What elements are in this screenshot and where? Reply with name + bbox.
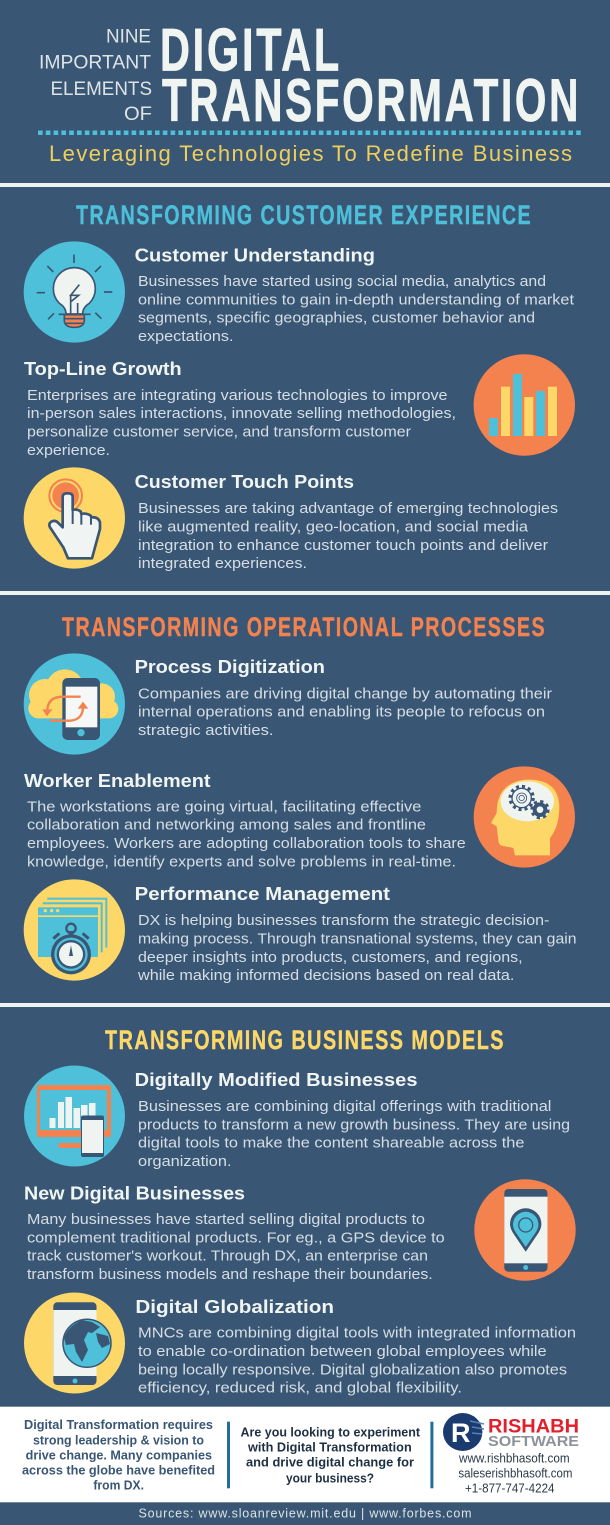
- title kicker: OF: [124, 103, 152, 125]
- contact details: [458, 1451, 572, 1495]
- body text: [137, 913, 577, 984]
- footer panel: [0, 1407, 610, 1502]
- panel: process digitization: [24, 653, 552, 755]
- center call to action: with Digital Transformation: [247, 1441, 412, 1455]
- icon: phone with location pin: [474, 1179, 576, 1281]
- body text: experience.: [27, 443, 110, 459]
- body text: [138, 501, 558, 572]
- center call to action: Are you looking to experiment: [240, 1426, 421, 1440]
- heading: Performance Management: [135, 883, 390, 904]
- contact details: www.rishbhasoft.com: [458, 1451, 570, 1465]
- panel: customer touch points: [24, 467, 558, 572]
- left callout: [22, 1418, 215, 1493]
- icon: light bulb: [24, 241, 125, 343]
- body text: complement traditional products. For eg., a GPS device to: [27, 1230, 445, 1246]
- body text: organization.: [138, 1154, 232, 1170]
- body text: [138, 686, 552, 739]
- body text: [138, 274, 574, 345]
- body text: personalize customer service, and transform customer: [27, 425, 411, 441]
- heading: Customer Understanding: [135, 245, 375, 266]
- center call to action: your business?: [286, 1471, 374, 1485]
- icon: cloud and phone: [24, 653, 125, 755]
- body text: in-person sales interactions, innovate selling methodologies,: [27, 406, 456, 422]
- icon: bar chart: [474, 354, 575, 456]
- icon: phone with globe: [24, 1292, 125, 1394]
- body text: efficiency, reduced risk, and global flexibility.: [138, 1381, 462, 1397]
- heading: New Digital Businesses: [24, 1183, 245, 1204]
- body text: collaboration and networking among sales and frontline: [27, 818, 426, 834]
- body text: Companies are driving digital change by automating their: [138, 686, 552, 702]
- body text: to enable co-ordination between global employees while: [138, 1344, 547, 1360]
- body text: The workstations are going virtual, facilitating effective: [27, 799, 421, 815]
- body text: internal operations and enabling its people to refocus on: [138, 705, 545, 721]
- body text: [27, 799, 466, 870]
- body text: deeper insights into products, customers, and regions,: [138, 950, 523, 966]
- body text: integration to enhance customer touch points and deliver: [138, 538, 548, 554]
- title kicker: IMPORTANT: [39, 51, 151, 73]
- body text: knowledge, identify experts and solve problems in real-time.: [27, 854, 456, 870]
- icon: windows and stopwatch: [24, 879, 125, 981]
- body text: transform business models and reshape their boundaries.: [27, 1267, 433, 1283]
- panel: worker enablement: [24, 766, 575, 870]
- body text: Businesses have started using social media, analytics and: [138, 274, 546, 290]
- title kicker: ELEMENTS: [50, 78, 152, 100]
- main title: DIGITAL: [160, 17, 342, 84]
- heading: Top-Line Growth: [24, 358, 182, 379]
- body text: expectations.: [138, 329, 234, 345]
- icon: pointing hand: [24, 467, 125, 569]
- title kicker: NINE: [106, 26, 151, 48]
- body text: online communities to gain in-depth understanding of market: [138, 292, 574, 308]
- heading: Process Digitization: [135, 656, 325, 677]
- center call to action: and drive digital change for: [246, 1456, 414, 1470]
- icon: monitor and phone: [24, 1066, 125, 1166]
- heading: Digital Globalization: [135, 1296, 334, 1317]
- left callout: drive change. Many companies: [26, 1449, 212, 1463]
- body text: MNCs are combining digital tools with integrated information: [138, 1326, 576, 1342]
- body text: while making informed decisions based on real data.: [137, 968, 514, 984]
- body text: making process. Through transnational systems, they can gain: [138, 932, 577, 948]
- contact details: saleserishbhasoft.com: [458, 1466, 572, 1480]
- left callout: strong leadership & vision to: [33, 1433, 204, 1447]
- panel: digitally modified businesses: [24, 1066, 570, 1170]
- logo: Rishabh Software: [443, 1413, 579, 1451]
- body text: [27, 388, 456, 459]
- body text: integrated experiences.: [138, 556, 307, 572]
- body text: Businesses are taking advantage of emerging technologies: [138, 501, 558, 517]
- title kicker: [39, 26, 152, 125]
- sources line: Sources: www.sloanreview.mit.edu | www.forbes.com: [138, 1507, 472, 1521]
- logo: Rishabh Software: R: [451, 1418, 470, 1448]
- body text: track customer's workout. Through DX, an enterprise can: [27, 1249, 428, 1265]
- body text: [138, 1099, 570, 1170]
- heading: Digitally Modified Businesses: [135, 1069, 418, 1090]
- body text: [138, 1326, 576, 1397]
- body text: [27, 1212, 445, 1283]
- panel: new digital businesses: [24, 1179, 576, 1283]
- panel: customer understanding: [24, 241, 574, 345]
- heading: Customer Touch Points: [135, 471, 354, 492]
- panel: top-line growth: [24, 354, 575, 459]
- logo: Rishabh Software: SOFTWARE: [488, 1433, 579, 1450]
- body text: employees. Workers are adopting collaboration tools to share: [27, 836, 466, 852]
- body text: being locally responsive. Digital globalization also promotes: [138, 1362, 567, 1378]
- contact details: +1-877-747-4224: [465, 1481, 555, 1495]
- body text: segments, specific geographies, customer behavior and: [138, 311, 535, 327]
- body text: DX is helping businesses transform the strategic decision-: [138, 913, 550, 929]
- icon: head with gears: [474, 766, 575, 868]
- left callout: across the globe have benefited: [22, 1464, 215, 1478]
- main title: [160, 17, 581, 134]
- body text: digital tools to make the content shareable across the: [138, 1136, 524, 1152]
- body text: Businesses are combining digital offerings with traditional: [138, 1099, 551, 1115]
- panel: digital globalization: [24, 1292, 576, 1397]
- center call to action: [240, 1426, 421, 1485]
- body text: Enterprises are integrating various technologies to improve: [27, 388, 448, 404]
- title block: [39, 17, 581, 134]
- left callout: Digital Transformation requires: [24, 1418, 213, 1432]
- body text: strategic activities.: [138, 723, 274, 739]
- body text: like augmented reality, geo-location, and social media: [138, 520, 529, 536]
- panel: performance management: [24, 879, 577, 984]
- heading: Worker Enablement: [24, 770, 210, 791]
- body text: products to transform a new growth business. They are using: [138, 1117, 570, 1133]
- body text: Many businesses have started selling digital products to: [27, 1212, 425, 1228]
- logo: Rishabh Software: RISHABH: [488, 1417, 579, 1438]
- left callout: from DX.: [93, 1479, 144, 1493]
- subtitle: Leveraging Technologies To Redefine Business: [49, 141, 572, 166]
